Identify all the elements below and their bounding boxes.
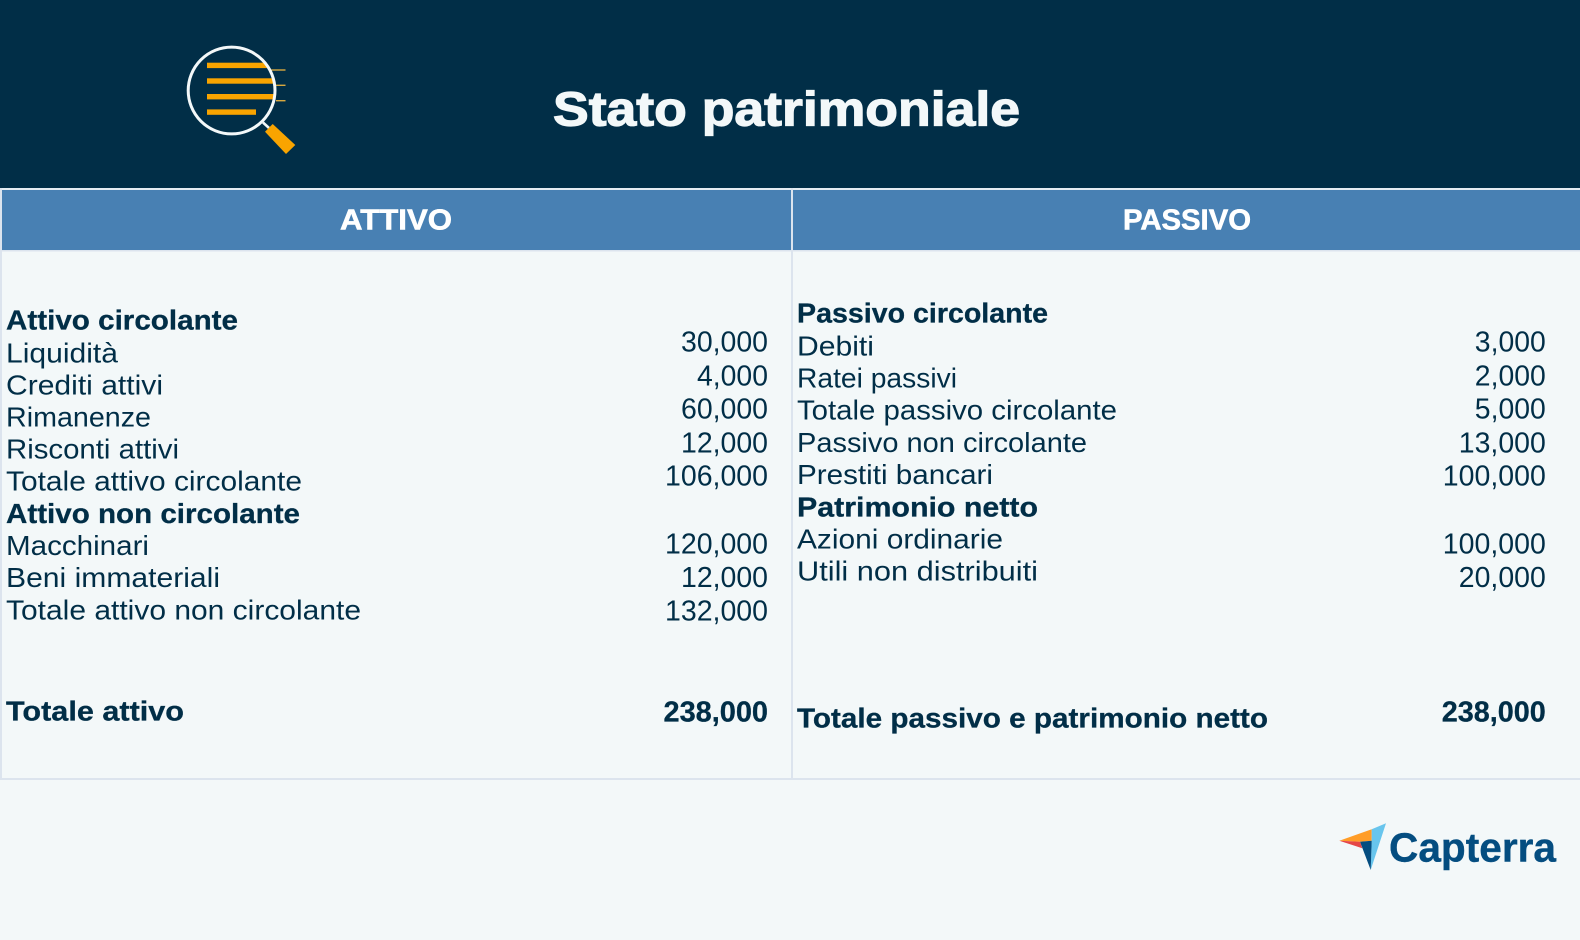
column header: attivo (2, 190, 791, 250)
value: 106,000 (665, 461, 768, 493)
panel: passivo labels (797, 298, 1268, 734)
header band (0, 0, 1580, 188)
row label: Beni immateriali (6, 562, 220, 593)
icon: Capterra arrow (1339, 823, 1386, 870)
value: 132,000 (665, 596, 768, 628)
row label: Macchinari (6, 530, 149, 561)
value: 4,000 (697, 360, 768, 392)
wordmark: Capterra (1389, 824, 1557, 870)
heading: attivo circolante: Attivo circolante (6, 305, 238, 336)
total value: 238,000 (664, 697, 768, 729)
row label: Totale attivo non circolante (6, 594, 361, 625)
value: 3,000 (1475, 326, 1546, 358)
row label: Ratei passivi (797, 362, 957, 394)
row label: Liquidità (6, 337, 118, 368)
row label: Utili non distribuiti (797, 556, 1038, 587)
value: 100,000 (1443, 461, 1546, 493)
column header: attivo: ATTIVO (340, 204, 452, 236)
heading: attivo non circolante: Attivo non circolante (6, 498, 300, 529)
column header: passivo (793, 190, 1580, 250)
value: 60,000 (681, 394, 768, 426)
panel: passivo values (1442, 326, 1546, 729)
value: 12,000 (681, 562, 768, 594)
icon: magnifying glass over text lines (188, 47, 295, 154)
column header: passivo: PASSIVO (1123, 204, 1251, 236)
value: 12,000 (681, 427, 768, 459)
row label: Totale attivo circolante (6, 466, 302, 497)
panel: attivo values (664, 326, 768, 729)
row label: Passivo non circolante (797, 427, 1087, 458)
value: 2,000 (1475, 360, 1546, 392)
Capterra logo (1339, 823, 1557, 870)
total label: Totale passivo e patrimonio netto (797, 703, 1268, 734)
panel: attivo labels (6, 305, 361, 727)
row label: Rimanenze (6, 401, 151, 432)
value: 20,000 (1459, 562, 1546, 594)
value: 30,000 (681, 326, 768, 358)
row label: Debiti (797, 330, 874, 361)
value: 13,000 (1459, 427, 1546, 459)
row label: Azioni ordinarie (797, 524, 1003, 554)
total value: 238,000 (1442, 697, 1546, 729)
row label: Risconti attivi (6, 434, 179, 464)
title: Stato patrimoniale (553, 84, 1020, 137)
heading: passivo circolante: Passivo circolante (797, 298, 1048, 329)
value: 100,000 (1443, 529, 1546, 561)
heading: patrimonio netto: Patrimonio netto (797, 492, 1038, 522)
row label: Crediti attivi (6, 370, 163, 400)
row label: Prestiti bancari (797, 459, 993, 490)
total label: Totale attivo (6, 696, 184, 727)
value: 120,000 (665, 529, 768, 561)
row label: Totale passivo circolante (797, 395, 1117, 426)
table frame lines (0, 188, 1580, 780)
value: 5,000 (1475, 394, 1546, 426)
